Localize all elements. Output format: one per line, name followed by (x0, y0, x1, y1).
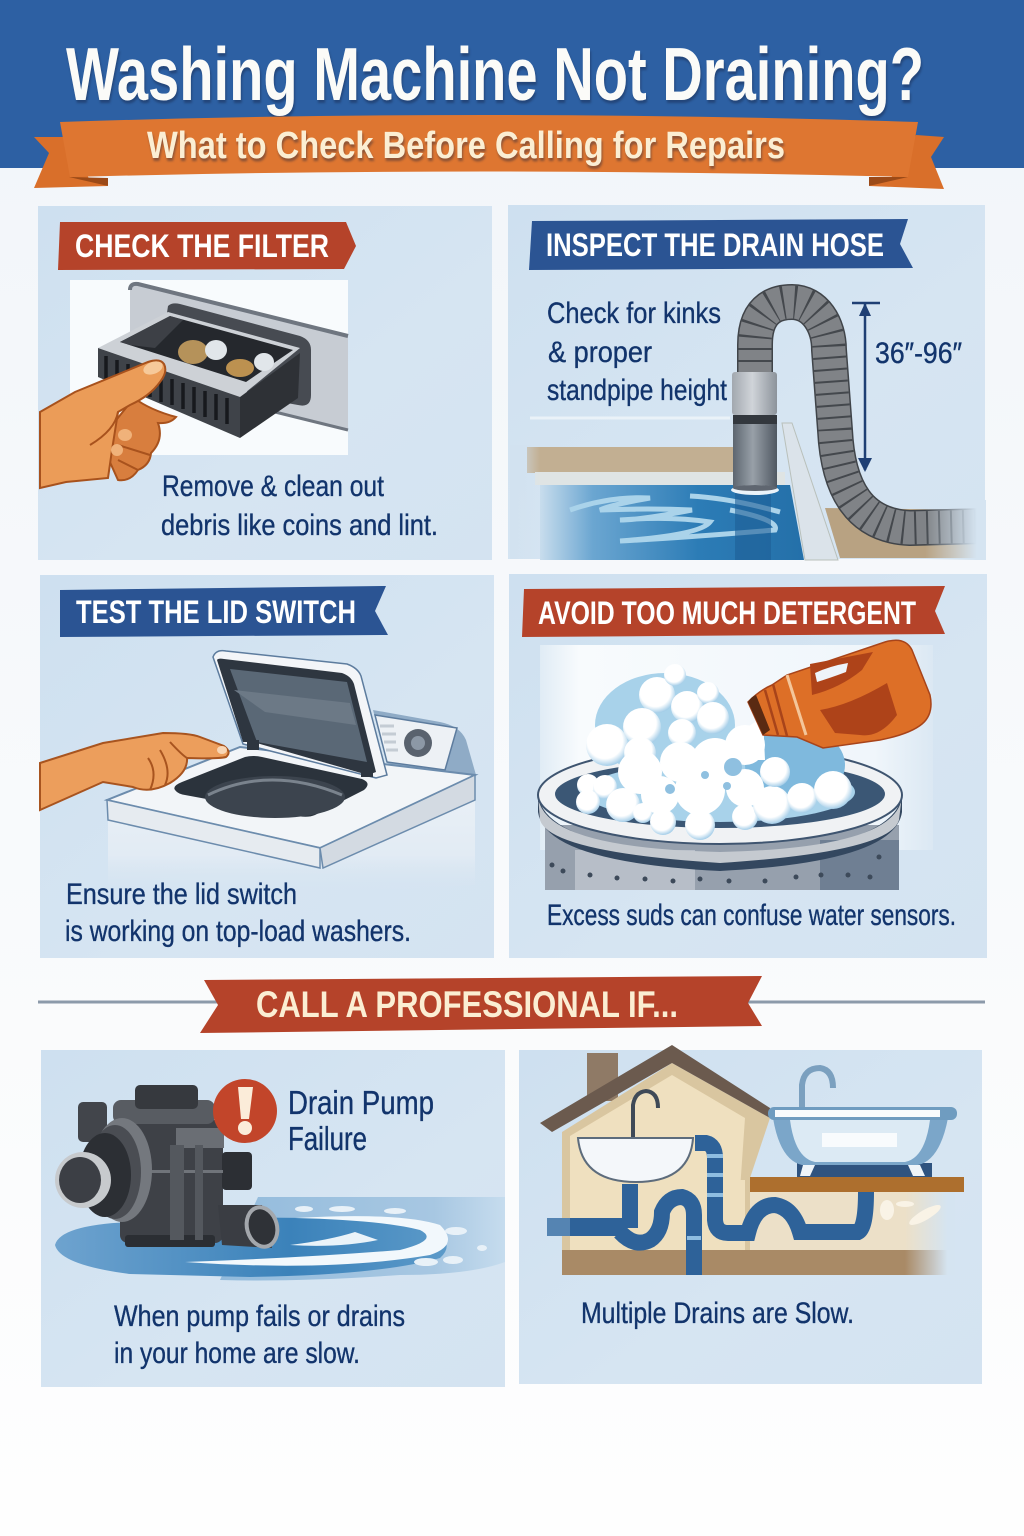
illustration: house (540, 1045, 955, 1275)
subtitle: What to Check Before Calling for Repairs (147, 125, 785, 167)
heading: test the lid switch (60, 586, 388, 637)
heading: inspect the drain hose (529, 219, 913, 270)
heading: check the filter (58, 222, 356, 270)
heading: test the lid switch: TEST THE LID SWITCH (76, 594, 356, 630)
text: drain pump failure: Failure (288, 1120, 367, 1157)
illustration: bathtub (750, 1068, 964, 1192)
heading: inspect the drain hose: INSPECT THE DRAIN HOSE (546, 227, 884, 263)
illustration: pipes (547, 1143, 866, 1275)
illustration: ground and water (510, 418, 985, 560)
text: remove and clean (161, 470, 438, 542)
panel: multiple drains slow (519, 1045, 982, 1384)
panel: test the lid switch (40, 575, 494, 958)
text: ensure the lid switch (65, 878, 411, 948)
heading: call a professional (200, 976, 762, 1033)
heading: avoid too much detergent (522, 586, 945, 637)
text: ensure the lid switch: is working on top-load washers. (65, 915, 411, 948)
text: when pump fails: When pump fails or drains (114, 1300, 405, 1333)
text: 36 to 96 inches: 36″-96″ (875, 337, 962, 370)
panel: drain pump failure (41, 1050, 505, 1387)
heading: check the filter: CHECK THE FILTER (75, 228, 329, 264)
icon: filter drawer in washer (70, 280, 348, 455)
heading: call a professional: CALL A PROFESSIONAL IF... (256, 984, 678, 1025)
panel: avoid too much detergent (509, 574, 987, 958)
header band (0, 0, 1024, 168)
illustration: suds (576, 664, 855, 840)
illustration: drain pump (55, 1085, 284, 1253)
text: remove and clean: debris like coins and lint. (161, 509, 438, 542)
text: remove and clean: Remove & clean out (162, 470, 385, 503)
icon: warning (213, 1079, 277, 1143)
panel: inspect the drain hose (508, 205, 986, 560)
text: drain pump failure (288, 1084, 434, 1157)
icon: detergent bottle (748, 640, 931, 748)
panel: check the filter (38, 206, 492, 560)
text: when pump fails: in your home are slow. (114, 1337, 360, 1370)
text: drain pump failure: Drain Pump (288, 1084, 434, 1121)
heading: avoid too much detergent: AVOID TOO MUCH DETERGENT (538, 595, 916, 631)
text: check for kinks: & proper (548, 336, 652, 369)
icon: hand (40, 359, 176, 488)
divider lines (38, 1000, 985, 1004)
icon: pointing hand (40, 733, 229, 810)
illustration: top-load washer (107, 651, 476, 895)
illustration: foam backdrop (540, 645, 933, 850)
illustration: sink (578, 1091, 693, 1182)
text: ensure the lid switch: Ensure the lid switch (66, 878, 297, 911)
text: multiple drains: Multiple Drains are Slow. (581, 1297, 854, 1330)
text: check for kinks (547, 297, 728, 407)
text: check for kinks: Check for kinks (547, 297, 721, 330)
illustration: washer drum (538, 746, 902, 890)
illustration: water puddle (55, 1197, 505, 1280)
illustration: drain hose (731, 302, 986, 560)
text: check for kinks: standpipe height (547, 374, 728, 407)
text: when pump fails (114, 1300, 405, 1370)
subtitle ribbon (34, 115, 944, 189)
height dimension arrow (852, 303, 880, 472)
